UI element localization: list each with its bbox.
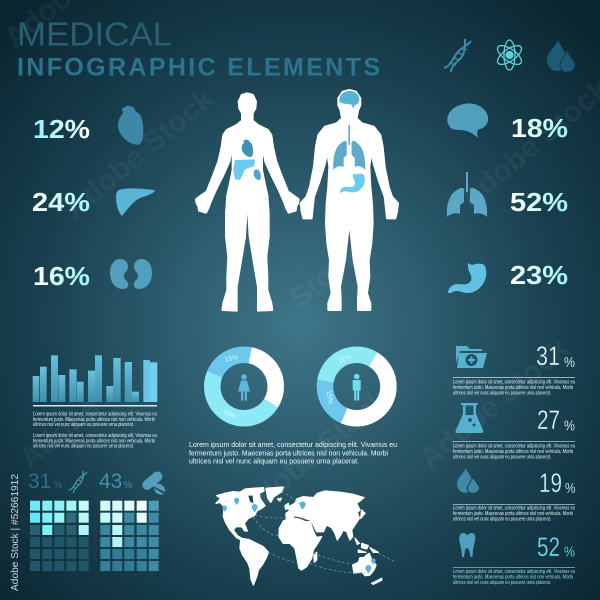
- watermark pattern: Stock: [283, 237, 367, 315]
- icon: medical folder: [456, 346, 487, 368]
- flight routes: [253, 492, 393, 573]
- icon: pills: [140, 469, 165, 495]
- chart caption 1: ultrices nisl vel nunc aliquam eu posuere urna placerat.: [33, 422, 134, 428]
- grid chart 2: [100, 501, 159, 571]
- title line 2: INFOGRAPHIC ELEMENTS: [17, 54, 380, 82]
- panel: top right icons: [444, 39, 575, 72]
- stat 18%: 18%: [511, 113, 568, 143]
- stat row: flask: fermentum justo. Maecenas porta ultrices nisl non vehicula. Morbi: [453, 449, 573, 455]
- title line 1: MEDICAL: [17, 16, 172, 52]
- icon: dna: [444, 39, 471, 72]
- organ: stomach: [340, 173, 365, 193]
- chart caption 1: [33, 412, 157, 428]
- donut: male: 15%: [325, 390, 334, 405]
- stat row: drops: fermentum justo. Maecenas porta ultrices nisl non vehicula. Morbi: [453, 511, 573, 517]
- axis line: [33, 405, 157, 406]
- value: 19: [539, 468, 562, 498]
- donut: female: 70%: [222, 409, 237, 421]
- stat 43%: 43%: [99, 470, 132, 493]
- icon: dna small: [69, 471, 87, 493]
- organ: lungs: [333, 125, 365, 170]
- panel: donut charts: [212, 353, 388, 421]
- value: 31: [536, 341, 560, 371]
- stat 24%: 24%: [32, 187, 90, 217]
- value: %: [564, 418, 575, 434]
- icon: male figure: [353, 374, 361, 400]
- text block: donut description: Lorem ipsum dolor sit amet, consectetur adipiscing elit. Vivamus eu: [189, 440, 397, 449]
- watermark pattern: Adobe: [13, 390, 106, 475]
- donut: male: 15%: [337, 353, 353, 365]
- donut: female: 15%: [224, 354, 239, 364]
- chart caption 2: ultrices nisl vel nunc aliquam eu posuere urna placerat.: [33, 444, 134, 450]
- value: 27: [537, 405, 560, 435]
- woman silhouette: [196, 93, 299, 311]
- text block: donut description: ultrices nisl vel nunc aliquam eu posuere urna placerat.: [189, 456, 359, 466]
- panel: human bodies: [196, 90, 398, 311]
- panel: right percentages: [447, 104, 568, 293]
- stat 31%: 31%: [28, 470, 62, 493]
- organ: liver: [233, 159, 255, 180]
- map pins: [222, 498, 376, 573]
- stat 12%: 12%: [33, 114, 90, 144]
- stat row: flask: [453, 403, 575, 460]
- icon: lungs: [447, 172, 487, 217]
- panel: bar chart: [33, 355, 157, 450]
- organ: kidney: [254, 169, 261, 180]
- value: 52: [537, 532, 560, 562]
- watermark pattern: Adobe Stock: [413, 332, 575, 475]
- stat row: tooth: [453, 532, 575, 586]
- stat row: flask: ultrices nisl vel nunc aliquam eu posuere urna placerat.: [453, 454, 551, 460]
- stat row: tooth: ultrices nisl vel nunc aliquam eu posuere urna placerat.: [453, 580, 551, 586]
- man silhouette: [301, 90, 398, 310]
- stat row: drops: ultrices nisl vel nunc aliquam eu posuere urna placerat.: [453, 516, 551, 522]
- value: %: [564, 544, 575, 560]
- icon: tooth: [459, 533, 475, 557]
- organ: brain: [339, 91, 359, 109]
- stat row: folder: fermentum justo. Maecenas porta ultrices nisl non vehicula. Morbi: [453, 385, 573, 391]
- chart caption 1: Lorem ipsum dolor sit amet, consectetur adipiscing elit. Vivamus eu: [33, 412, 157, 418]
- chart caption 2: [33, 433, 157, 450]
- bars: [33, 355, 157, 402]
- hudson bay: [248, 496, 253, 503]
- text block: donut description: fermentum justo. Maecenas porta ultrices nisl non vehicula. Morbi: [189, 448, 388, 458]
- stat 23%: 23%: [510, 260, 568, 290]
- value: %: [565, 480, 576, 497]
- icon: brain: [447, 104, 488, 138]
- organ: heart: [242, 139, 253, 157]
- chart caption 1: fermentum justo. Maecenas porta ultrices nisl non vehicula. Morbi: [33, 417, 155, 423]
- title: [17, 16, 380, 82]
- world map: [216, 487, 393, 585]
- icon: kidneys: [110, 259, 152, 289]
- icon: heart: [118, 106, 143, 145]
- chart caption 2: Lorem ipsum dolor sit amet, consectetur adipiscing elit. Vivamus eu: [33, 433, 157, 439]
- icon: liver: [116, 188, 155, 216]
- donut: female: [212, 354, 276, 421]
- watermark pattern: Adobe Stock: [58, 82, 220, 225]
- chart caption 2: fermentum justo. Maecenas porta ultrices nisl non vehicula. Morbi: [33, 438, 155, 444]
- panel: left percentages: [32, 106, 155, 291]
- icon: stomach: [448, 263, 486, 293]
- stat row: tooth: fermentum justo. Maecenas porta ultrices nisl non vehicula. Morbi: [453, 574, 573, 580]
- stock id vertical text: Adobe Stock | #52661912: [9, 474, 21, 591]
- icon: drops: [457, 468, 479, 494]
- stat row: drops: [453, 468, 576, 522]
- icon: drops: [547, 40, 575, 72]
- grid chart 1: [30, 501, 89, 571]
- icon: female figure: [238, 374, 250, 400]
- watermark pattern: Adobe Stock: [233, 382, 395, 525]
- icon: atom: [495, 40, 524, 70]
- stat row: folder: ultrices nisl vel nunc aliquam eu posuere urna placerat.: [453, 390, 551, 396]
- stat row: folder: [453, 341, 575, 396]
- stat 16%: 16%: [33, 261, 90, 291]
- panel: right stats list: [453, 341, 576, 586]
- value: %: [564, 354, 575, 371]
- continents: [216, 487, 382, 585]
- text block: donut description: [189, 440, 397, 466]
- donut: male: [325, 353, 388, 418]
- icon: flask: [456, 403, 483, 433]
- panel: squares charts: [28, 469, 165, 571]
- stat 52%: 52%: [510, 187, 568, 217]
